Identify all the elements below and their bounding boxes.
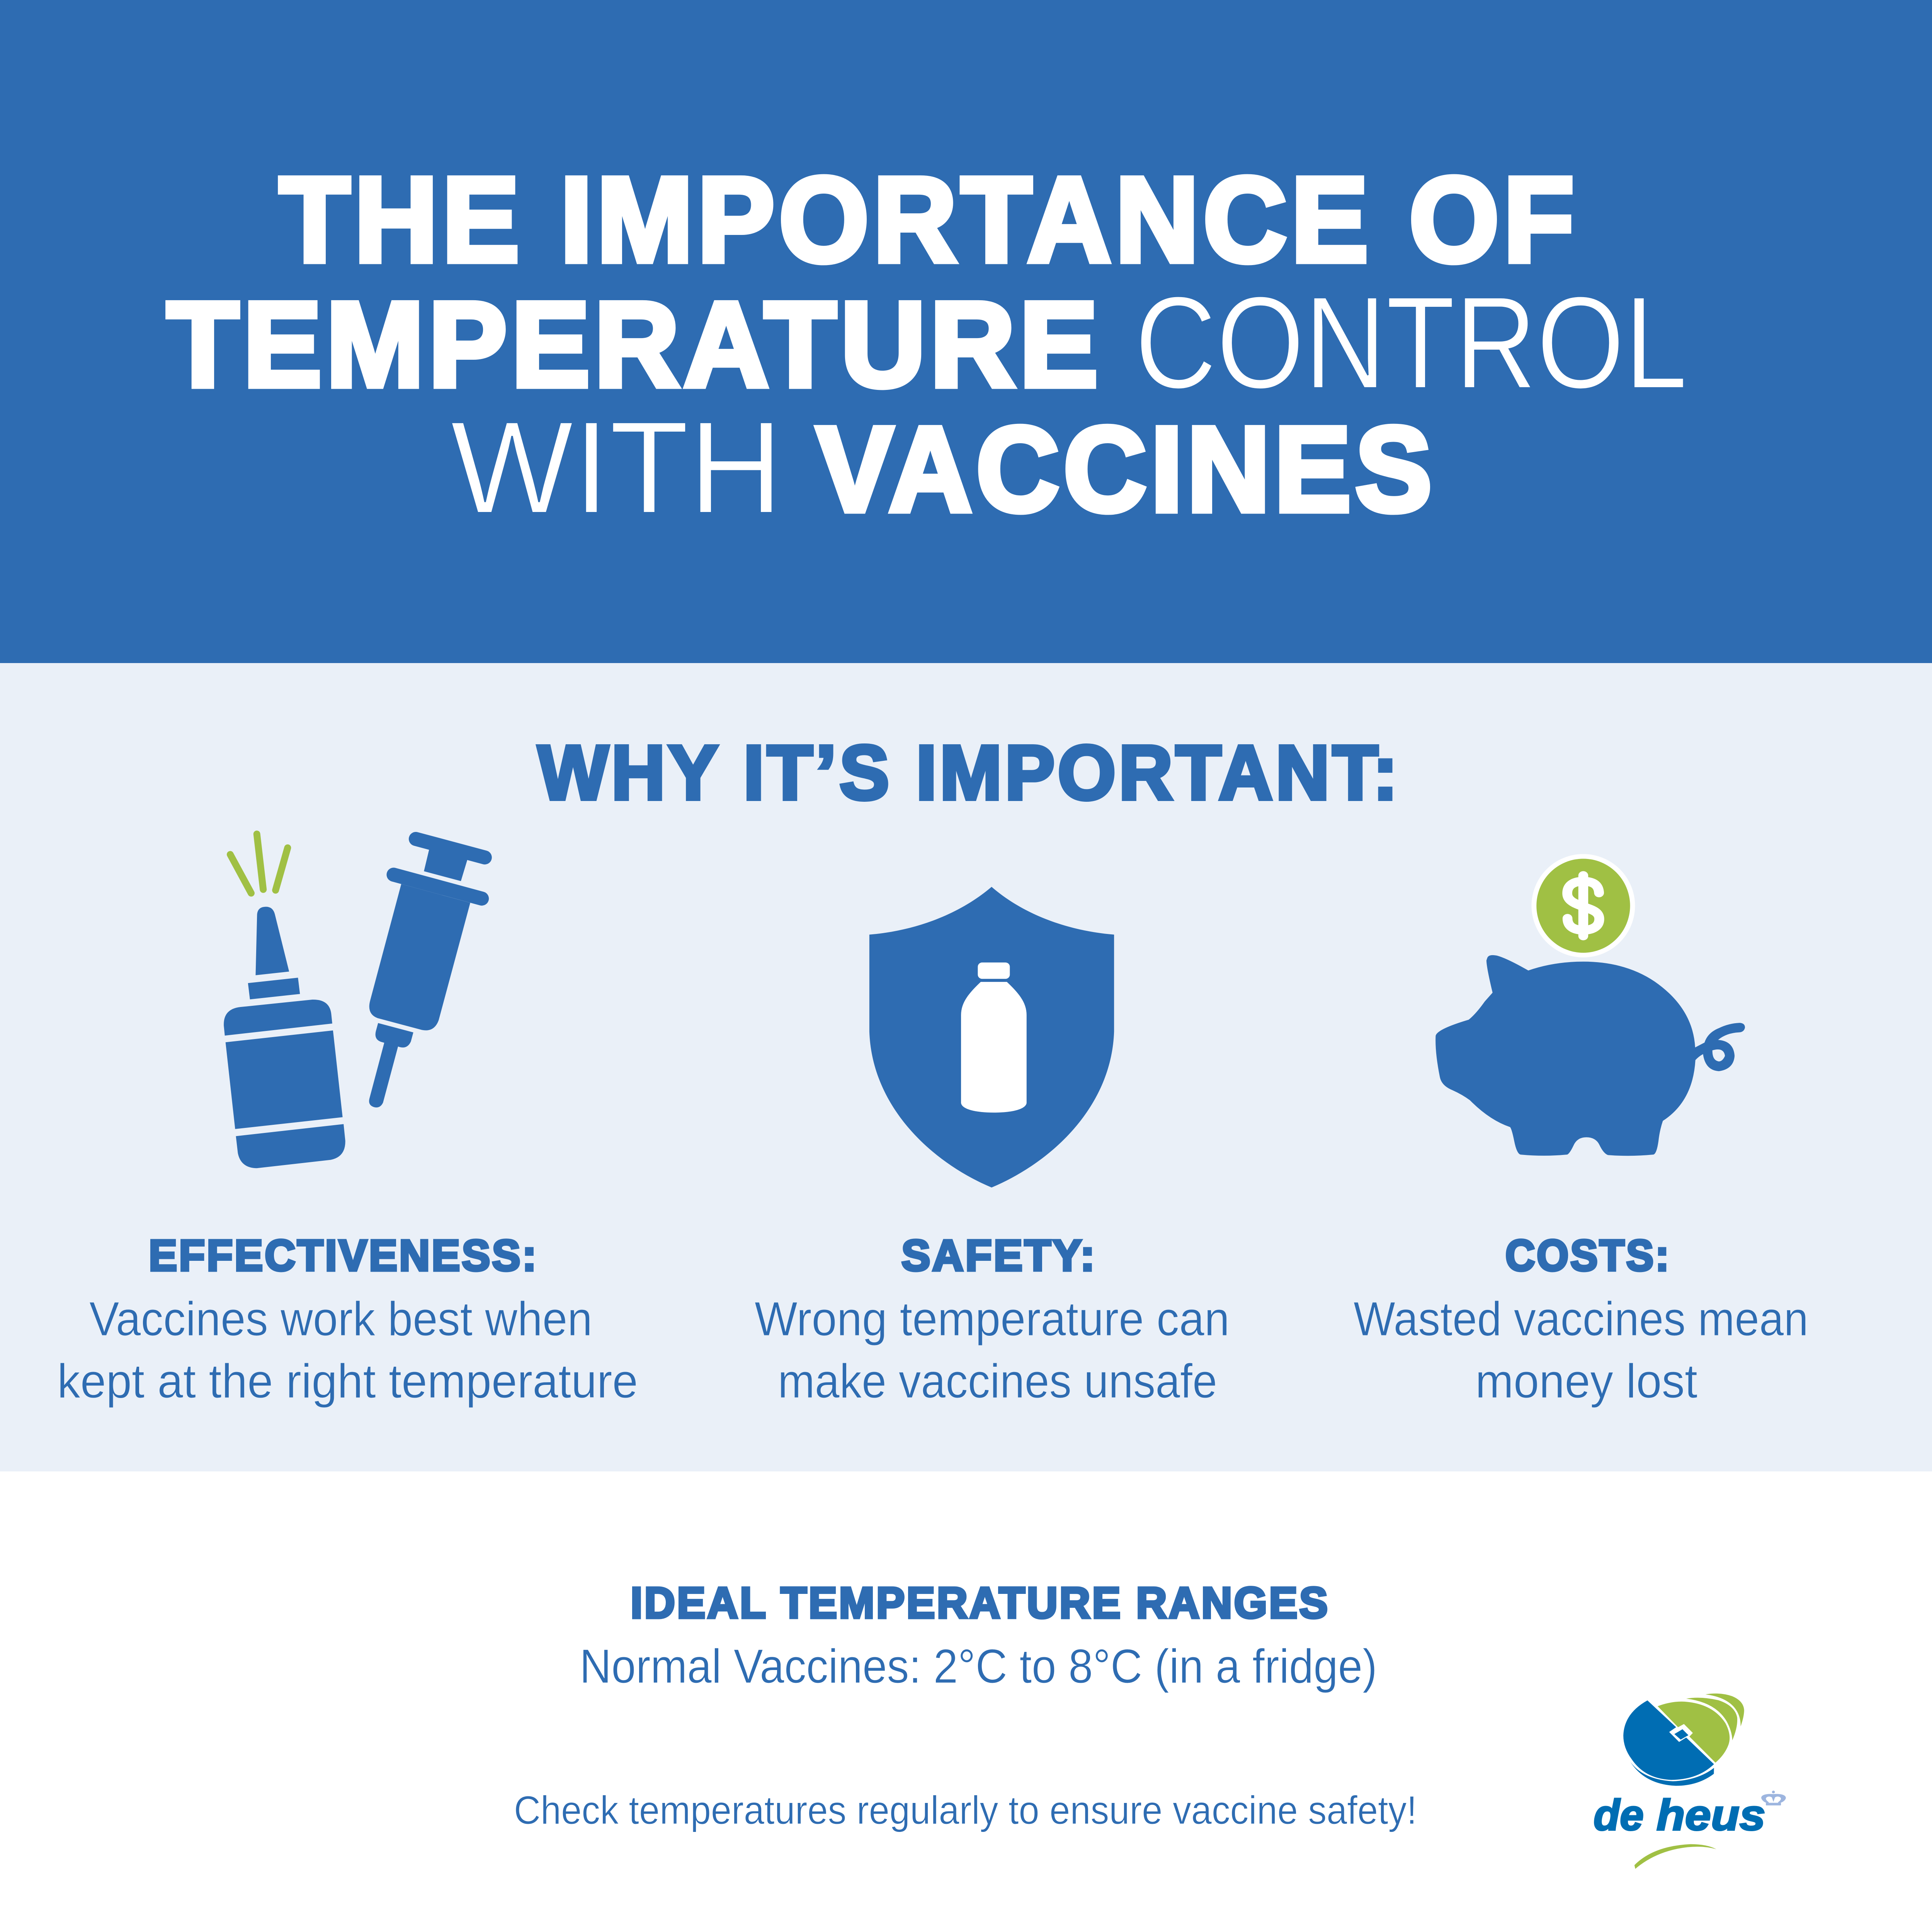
icon: syringe — [369, 839, 485, 1107]
text block: effectiveness: kept at the right temperature — [57, 1355, 638, 1408]
text block: effectiveness — [57, 1231, 638, 1408]
footer note: Check temperatures regularly to ensure vaccine safety! — [514, 1788, 1417, 1832]
title: THE IMPORTANCE OF — [279, 153, 1578, 287]
icon: shield with bottle — [869, 887, 1114, 1187]
title: TEMPERATURE — [167, 277, 1102, 412]
text block: effectiveness: EFFECTIVENESS: — [149, 1231, 538, 1280]
text block: safety: make vaccines unsafe — [778, 1355, 1217, 1408]
text block: safety: SAFETY: — [901, 1231, 1097, 1280]
logo: de heus — [1594, 1694, 1786, 1869]
section heading: WHY IT’S IMPORTANT: — [538, 730, 1401, 816]
icon: dropper bottle and syringe — [224, 834, 485, 1168]
icon: dropper bottle — [224, 907, 345, 1168]
text block: costs: Wasted vaccines mean — [1354, 1293, 1808, 1346]
icon: white bottle — [961, 963, 1027, 1112]
text block: ideal temperature ranges — [580, 1578, 1377, 1693]
text block: costs: COSTS: — [1505, 1231, 1671, 1280]
icon: green spray lines — [230, 834, 287, 893]
header band — [0, 0, 1932, 663]
logo: de heus: heus — [1656, 1791, 1765, 1839]
logo: de heus: de — [1594, 1791, 1644, 1839]
text block: effectiveness: Vaccines work best when — [89, 1293, 592, 1346]
title: VACCINES — [816, 402, 1436, 537]
text block: ideal temperature ranges: IDEAL TEMPERATURE RANGES — [631, 1578, 1330, 1627]
title: WITH — [451, 394, 783, 541]
icon: dollar coin — [1532, 854, 1635, 957]
text block: safety — [755, 1231, 1230, 1408]
text block: safety: Wrong temperature can — [755, 1293, 1230, 1346]
panel: why it's important background — [0, 663, 1932, 1471]
text block: costs: money lost — [1475, 1355, 1697, 1408]
title — [167, 153, 1687, 541]
icon: piggy bank with coin — [1435, 854, 1745, 1156]
icon: pig silhouette — [1435, 955, 1745, 1156]
text block: costs — [1354, 1231, 1808, 1408]
title: CONTROL — [1135, 269, 1687, 416]
text block: ideal temperature ranges: Normal Vaccines: 2°C to 8°C (in a fridge) — [580, 1640, 1377, 1693]
